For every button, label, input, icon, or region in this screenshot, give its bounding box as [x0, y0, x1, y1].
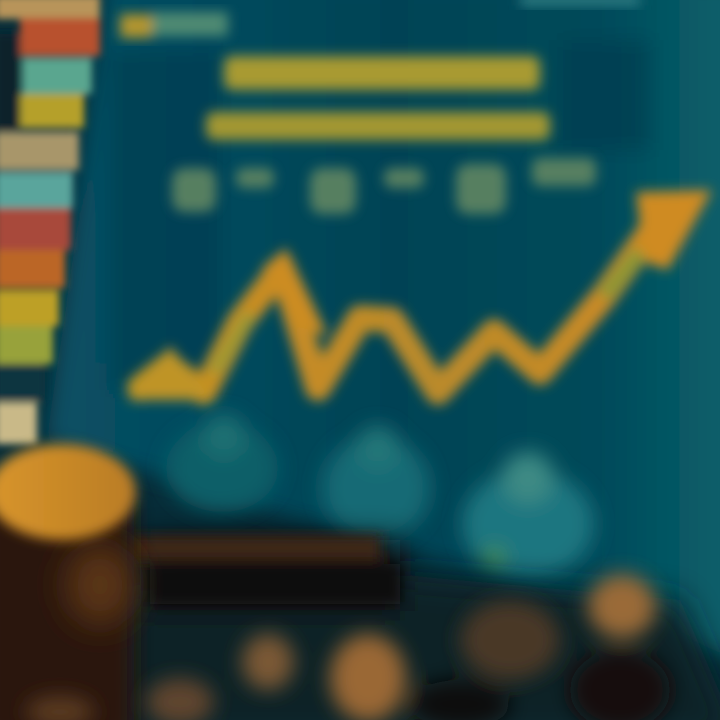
text block: blurred subtitle columns [172, 158, 596, 214]
title: blurred headline lines [206, 56, 550, 140]
icon: middle teal cluster [322, 426, 430, 540]
foreground: dark lower area [90, 540, 720, 720]
foreground: dark table edge [130, 536, 400, 604]
heading: small top-left label [120, 12, 228, 38]
heading: small top-right label [520, 0, 640, 6]
icon: left teal cluster [166, 414, 278, 512]
foreground: blurred coins, bottom [26, 574, 670, 720]
foreground: stack of coins, left [0, 444, 136, 720]
icon: right teal cluster [462, 452, 594, 578]
line chart: golden zig-zag trend [128, 190, 712, 400]
arrow head [636, 190, 712, 270]
panel: left colour swatch strip [0, 0, 100, 444]
